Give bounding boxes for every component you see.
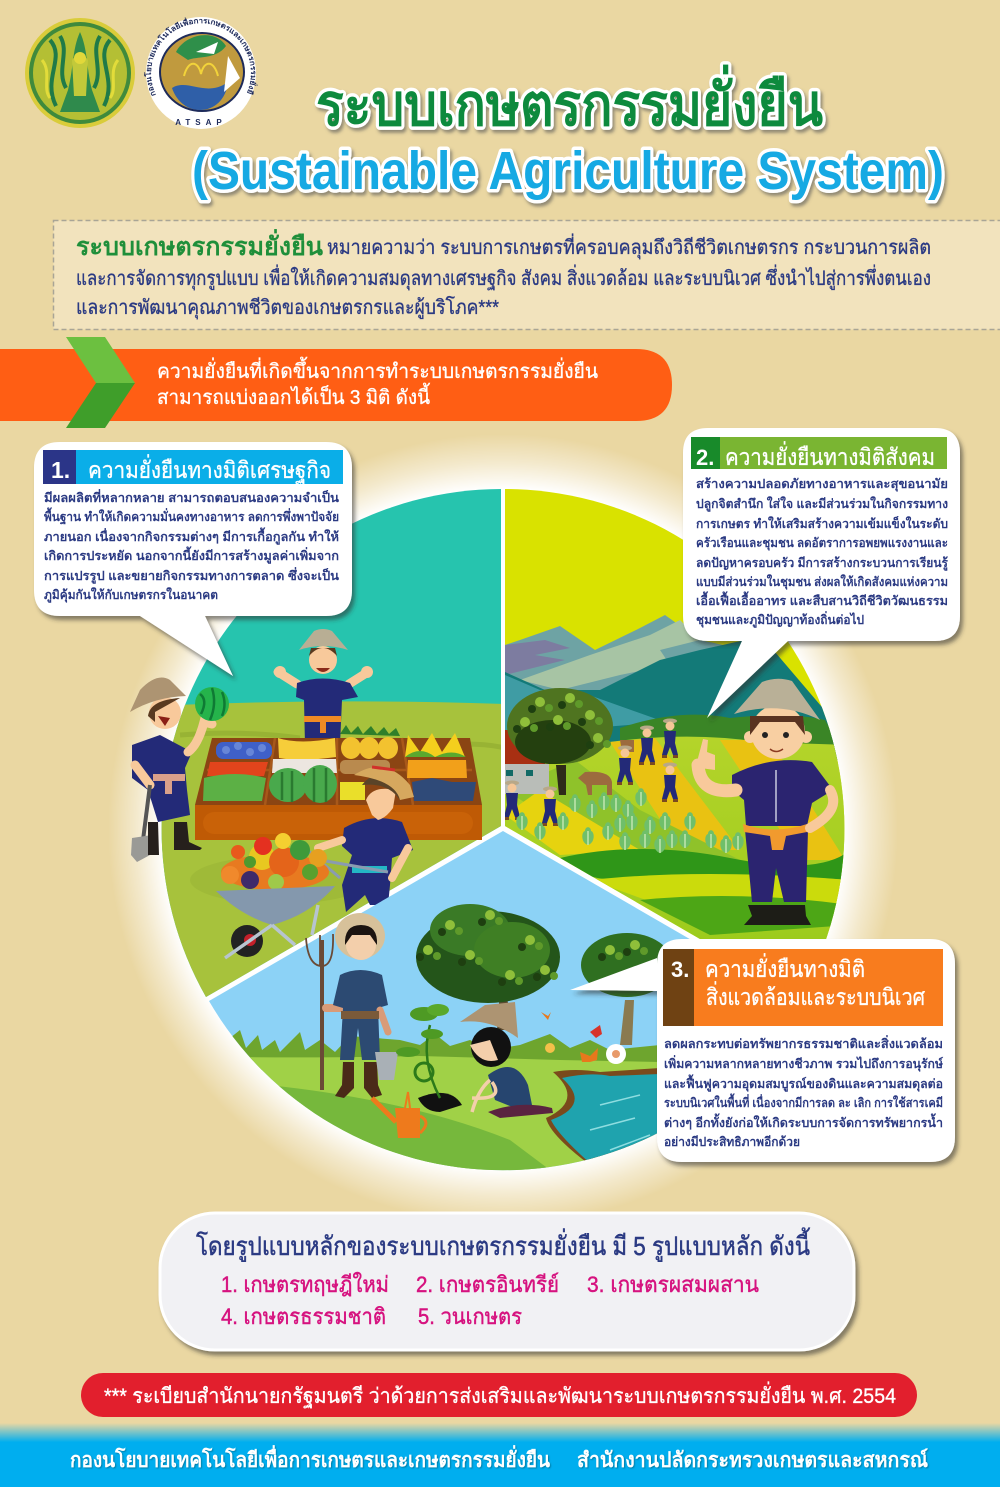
callout body <box>664 1035 943 1149</box>
callout header: 2. <box>696 445 714 470</box>
callout body: ลดปัญหาครอบครัว มีการสร้างกระบวนการเรียนรู้ <box>696 556 948 571</box>
list of forms: 3. เกษตรผสมผสาน <box>587 1272 759 1297</box>
ground <box>230 1056 660 1175</box>
produce <box>203 725 476 803</box>
reference note pill <box>81 1373 917 1417</box>
reference note pill: *** ระเบียบสำนักนายกรัฐมนตรี ว่าด้วยการส่งเสริมและพัฒนาระบบเกษตรกรรมยั่งยืน พ.ศ. 2554 <box>104 1381 896 1408</box>
buffalo <box>578 740 634 795</box>
callout body: เกิดการประหยัด นอกจากนี้ยังมีการสร้างมูลค่าเพิ่มจาก <box>44 546 339 564</box>
callout header: สิ่งแวดล้อมและระบบนิเวศ <box>706 981 925 1010</box>
pond <box>546 1068 660 1165</box>
callout: environment <box>570 939 955 1162</box>
tree <box>507 688 613 795</box>
house <box>505 730 549 794</box>
farmer: thumbs up <box>698 679 833 925</box>
callout header: ความยั่งยืนทางมิติสังคม <box>725 441 935 470</box>
callout header <box>663 949 943 1026</box>
panel: definition <box>54 220 1000 330</box>
list of forms: 5. วนเกษตร <box>418 1304 522 1329</box>
icon: green chevron <box>66 337 135 428</box>
farmer behind stall <box>274 629 373 745</box>
footer band <box>0 1423 1000 1487</box>
pie glow <box>108 434 898 1224</box>
callout body: เอื้อเฟื้อเอื้ออาทร และสืบสานวิถีชีวิตวัฒนธรรม <box>696 591 948 608</box>
callout body: ปลูกจิตสำนึก ใส่ใจ และมีส่วนร่วมในกิจกรรมทาง <box>696 496 948 512</box>
callout header <box>691 437 947 470</box>
callout header: 3. <box>671 957 689 982</box>
pie: environment sector <box>209 831 690 1170</box>
farmer with pitchfork <box>306 913 398 1098</box>
definition text <box>76 233 931 320</box>
mountains <box>505 615 850 760</box>
wheelbarrow with fruit <box>216 833 388 958</box>
list of forms <box>221 1272 759 1329</box>
title: Thai: ระบบเกษตรกรรมยั่งยืน <box>316 64 823 138</box>
callout body: การแปรรูป และขยายกิจกรรมทางการตลาด ซึ่งจะเป็น <box>44 567 339 584</box>
callout: social <box>683 428 960 718</box>
small workers <box>504 718 678 826</box>
flowers and butterflies <box>541 1012 626 1064</box>
banner text: ความยั่งยืนที่เกิดขึ้นจากการทำระบบเกษตรกรรมยั่งยืน <box>157 357 598 383</box>
pie: economic sector <box>150 480 510 1010</box>
watering can <box>372 1092 426 1138</box>
rice fields <box>505 737 850 945</box>
definition text: และการพัฒนาคุณภาพชีวิตของเกษตรกรและผู้บริโภค*** <box>76 296 499 320</box>
definition text: หมายความว่า ระบบการเกษตรที่ครอบคลุมถึงวิถีชีวิตเกษตรกร กระบวนการผลิต <box>327 233 931 260</box>
seedling and soil <box>396 1004 462 1112</box>
callout header: ความยั่งยืนทางมิติเศรษฐกิจ <box>88 454 331 484</box>
callout body: แบบมีส่วนร่วมในชุมชน ส่งผลให้เกิดสังคมแห่งความ <box>696 574 948 590</box>
callout header: ความยั่งยืนทางมิติ <box>705 953 865 982</box>
footer: agency: กองนโยบายเทคโนโลยีเพื่อการเกษตรและเกษตรกรรมยั่งยืน <box>70 1444 551 1472</box>
callout body: ภูมิคุ้มกันให้กับเกษตรกรในอนาคต <box>44 587 218 603</box>
logo: royal seal <box>25 18 135 128</box>
list of forms: 1. เกษตรทฤษฎีใหม่ <box>221 1272 389 1297</box>
lettuce rows <box>516 788 744 853</box>
banner: three dimensions <box>0 337 672 428</box>
banner text: สามารถแบ่งออกได้เป็น 3 มิติ ดังนี้ <box>157 383 430 409</box>
callout body: ต่างๆ อีกทั้งยังก่อให้เกิดระบบการจัดการทรัพยากรน้ำ <box>664 1113 943 1130</box>
list of forms: 2. เกษตรอินทรีย์ <box>416 1272 559 1297</box>
callout body <box>696 477 948 628</box>
footer: ministry: สำนักงานปลัดกระทรวงเกษตรและสหกรณ์ <box>577 1448 928 1472</box>
callout body: ภายนอก เนื่องจากกิจกรรมต่างๆ มีการเกื้อกูลกัน ทำให้ <box>44 527 339 545</box>
callout body: ชุมชนและภูมิปัญญาท้องถิ่นต่อไป <box>696 611 864 628</box>
callout body: อย่างมีประสิทธิภาพอีกด้วย <box>664 1135 800 1149</box>
callout header: 1. <box>51 457 70 483</box>
callout body: พื้นฐาน ทำให้เกิดความมั่นคงทางอาหาร ลดการพึ่งพาปัจจัย <box>44 507 339 525</box>
callout header <box>43 450 343 484</box>
definition heading: ระบบเกษตรกรรมยั่งยืน <box>76 229 323 261</box>
kneeling gardener <box>460 1002 553 1118</box>
callout body: เพิ่มความหลากหลายทางชีวภาพ รวมไปถึงการอนุรักษ์ <box>664 1055 943 1072</box>
pie: social sector <box>505 489 844 939</box>
farmer with wheelbarrow <box>318 767 414 912</box>
panel heading: โดยรูปแบบหลักของระบบเกษตรกรรมยั่งยืน มี 5 รูปแบบหลัก ดังนี้ <box>196 1227 810 1262</box>
callout: economic <box>34 442 352 676</box>
callout body <box>44 489 339 603</box>
callout body: สร้างความปลอดภัยทางอาหารและสุขอนามัย <box>696 477 948 492</box>
callout body: ครัวเรือนและชุมชน ลดอัตราการอพยพแรงงานและ <box>696 536 948 551</box>
farmer with watermelon and shovel <box>130 678 229 862</box>
logo: ATSAP <box>144 17 258 129</box>
logo: ATSAP: ATSAP <box>175 118 227 127</box>
panel: five main forms <box>160 1213 854 1350</box>
grass fringe <box>200 1030 660 1070</box>
illustration: market stall <box>0 428 1000 1487</box>
callout body: ระบบนิเวศในพื้นที่ เนื่องจากมีการลด ละ เลิก การใช้สารเคมี <box>664 1093 943 1110</box>
stall crate <box>195 738 482 840</box>
callout body: และฟื้นฟูความอุดมสมบูรณ์ของดินและความสมดุลต่อ <box>664 1074 943 1092</box>
callout body: ลดผลกระทบต่อทรัพยากรธรรมชาติและสิ่งแวดล้อม <box>664 1035 943 1051</box>
callout body: มีผลผลิตที่หลากหลาย สามารถตอบสนองความจำเป็น <box>44 489 339 505</box>
callout body: การเกษตร ทำให้เสริมสร้างความเข้มแข็งในระดับ <box>696 516 948 531</box>
banner text <box>157 357 598 409</box>
trees <box>416 904 673 1045</box>
list of forms: 4. เกษตรธรรมชาติ <box>221 1304 386 1329</box>
